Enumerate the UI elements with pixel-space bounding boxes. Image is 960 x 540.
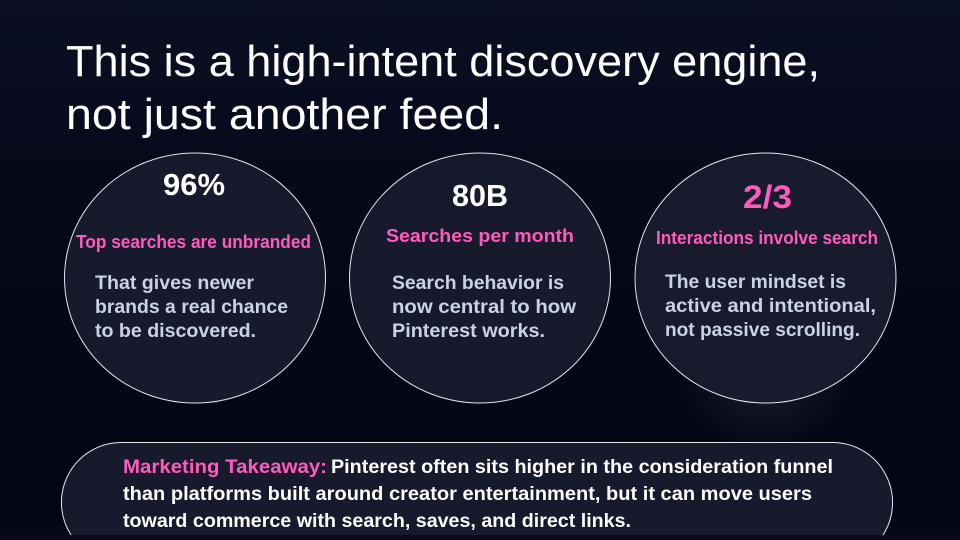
stat: 80B: 80B [452, 178, 508, 213]
text: marketing takeaway: than platforms built around creator entertainment, but it can move users [123, 484, 812, 505]
text: 96% description: to be discovered. [95, 321, 256, 342]
stat: 96%: 96% [163, 167, 225, 202]
text: 80B description: Search behavior is [392, 273, 564, 294]
text: 80B description: Pinterest works. [392, 321, 545, 342]
panel: marketing takeaway [61, 442, 893, 535]
title: This is a high-intent discovery engine, [66, 37, 820, 86]
text: marketing takeaway: Pinterest often sits higher in the consideration funnel [331, 457, 833, 478]
title: not just another feed. [66, 90, 503, 139]
text: 80B description: now central to how [392, 297, 576, 318]
text: 96% description: That gives newer [95, 273, 255, 294]
title [66, 37, 820, 139]
text: 2/3 description: The user mindset is [665, 272, 846, 293]
text: marketing takeaway: Marketing Takeaway: [123, 457, 327, 478]
panel: 80B stat circle [350, 153, 610, 403]
text: 2/3 description [665, 272, 876, 341]
text: 2/3 description: not passive scrolling. [665, 320, 860, 341]
text: 96% description [95, 273, 288, 342]
panel: 2/3 stat circle [635, 153, 896, 403]
stat: 2/3: 2/3 [743, 179, 792, 215]
text: 80B description [392, 273, 576, 342]
subheading: top searches: Top searches are unbranded [76, 232, 311, 252]
text: marketing takeaway: toward commerce with search, saves, and direct links. [123, 511, 631, 532]
text: marketing takeaway [123, 457, 833, 532]
text: 2/3 description: active and intentional, [665, 296, 876, 317]
subheading: interactions: Interactions involve search [656, 228, 878, 248]
panel: 96% stat circle [64, 153, 326, 403]
subheading: searches per month: Searches per month [386, 226, 574, 246]
text: 96% description: brands a real chance [95, 297, 288, 318]
